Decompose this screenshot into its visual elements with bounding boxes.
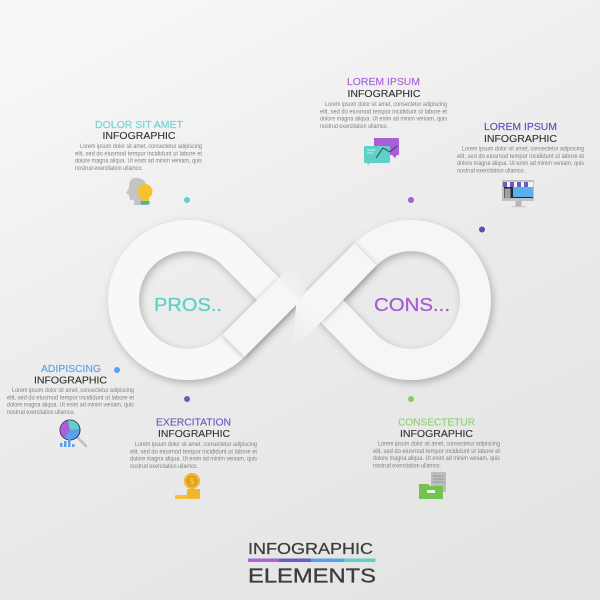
icon: magnifier with pie chart [60, 420, 86, 447]
connector dot: teal [184, 197, 190, 203]
body text: nostrud exercitation ullamco. [373, 462, 441, 469]
heading: CONSECTETUR [398, 418, 475, 428]
body text: Lorem ipsum dolor sit amet, consectetur adipiscing [462, 146, 584, 152]
body text: elit, sed do eiusmod tempor incididunt ut labore et [75, 150, 202, 157]
heading: LOREM IPSUM [484, 122, 557, 133]
subheading: INFOGRAPHIC [484, 134, 557, 145]
body text [7, 387, 134, 416]
body text: Lorem ipsum dolor sit amet, consectetur adipiscing [378, 440, 500, 448]
title line: infographic: INFOGRAPHIC [248, 541, 373, 558]
subheading: INFOGRAPHIC [34, 376, 107, 386]
subheading: INFOGRAPHIC [158, 429, 230, 440]
title line: elements: ELEMENTS [248, 566, 376, 588]
panel: adipiscing [7, 364, 134, 447]
body text: dolore magna aliqua. Ut enim ad minim veniam, quis [457, 160, 584, 167]
icon: shop on monitor [502, 180, 534, 207]
body text: nostrud exercitation ullamco. [320, 123, 388, 130]
connector dot: blue [114, 367, 120, 373]
body text [320, 101, 447, 130]
body text: Lorem ipsum dolor sit amet, consectetur adipiscing [325, 101, 447, 108]
body text: Lorem ipsum dolor sit amet, consectetur adipiscing [135, 441, 257, 448]
body text [457, 146, 584, 174]
left loop [108, 220, 301, 380]
heading: ADIPISCING [41, 364, 101, 375]
body text: nostrud exercitation ullamco. [7, 409, 75, 416]
crossing fold: upper fade [278, 264, 308, 300]
body text: nostrud exercitation ullamco. [75, 165, 143, 172]
panel: lorem ipsum indigo [457, 122, 584, 207]
body text: nostrud exercitation ullamco. [457, 167, 525, 174]
body text: dolore magna aliqua. Ut enim ad minim veniam, quis [130, 456, 257, 463]
body text: elit, sed do eiusmod tempor incididunt ut labore et [457, 153, 584, 160]
body text: Lorem ipsum dolor sit amet, consectetur adipiscing [80, 143, 202, 150]
body text [130, 441, 257, 470]
body text: elit, sed do eiusmod tempor incididunt ut labore et [7, 394, 134, 401]
connector dot: purple [408, 197, 414, 203]
heading: DOLOR SIT AMET [95, 120, 183, 131]
body text [373, 440, 500, 469]
body text: dolore magna aliqua. Ut enim ad minim veniam, quis [320, 116, 447, 123]
connector dot: indigo right [479, 226, 485, 232]
connector dot: green [408, 396, 414, 402]
label: pros: PROS.. [154, 294, 222, 315]
body text: elit, sed do eiusmod tempor incididunt ut labore et [373, 448, 500, 455]
body text: dolore magna aliqua. Ut enim ad minim veniam, quis [373, 455, 500, 462]
body text [75, 143, 202, 172]
panel: dolor sit amet [75, 120, 202, 205]
icon: chat bubbles with chart [364, 138, 399, 166]
title underline [248, 558, 376, 562]
subheading: INFOGRAPHIC [102, 131, 176, 142]
panel: consectetur [373, 418, 500, 499]
body text: dolore magna aliqua. Ut enim ad minim veniam, quis [7, 402, 134, 409]
heading: LOREM IPSUM [347, 77, 420, 88]
title [248, 541, 376, 588]
subheading: INFOGRAPHIC [400, 429, 473, 440]
body text: nostrud exercitation ullamco. [130, 463, 198, 470]
panel: exercitation [130, 418, 257, 499]
label: cons: CONS... [374, 294, 450, 315]
right loop [299, 220, 491, 380]
icon: coins: $ [190, 477, 195, 486]
panel: lorem ipsum purple [320, 77, 447, 166]
crossing fold: lower fade [293, 299, 323, 350]
infinity symbol [108, 220, 491, 380]
body text: dolore magna aliqua. Ut enim ad minim veniam, quis [75, 158, 202, 165]
body text: elit, sed do eiusmod tempor incididunt ut labore et [320, 108, 447, 115]
subheading: INFOGRAPHIC [348, 89, 420, 100]
icon: head with light bulb [126, 178, 152, 205]
connector dot: indigo left [184, 396, 190, 402]
heading: EXERCITATION [156, 418, 231, 428]
crossing band [223, 243, 376, 357]
body text: elit, sed do eiusmod tempor incididunt ut labore et [130, 448, 257, 455]
body text: Lorem ipsum dolor sit amet, consectetur adipiscing [12, 387, 134, 394]
icon: folder with document [419, 472, 446, 499]
